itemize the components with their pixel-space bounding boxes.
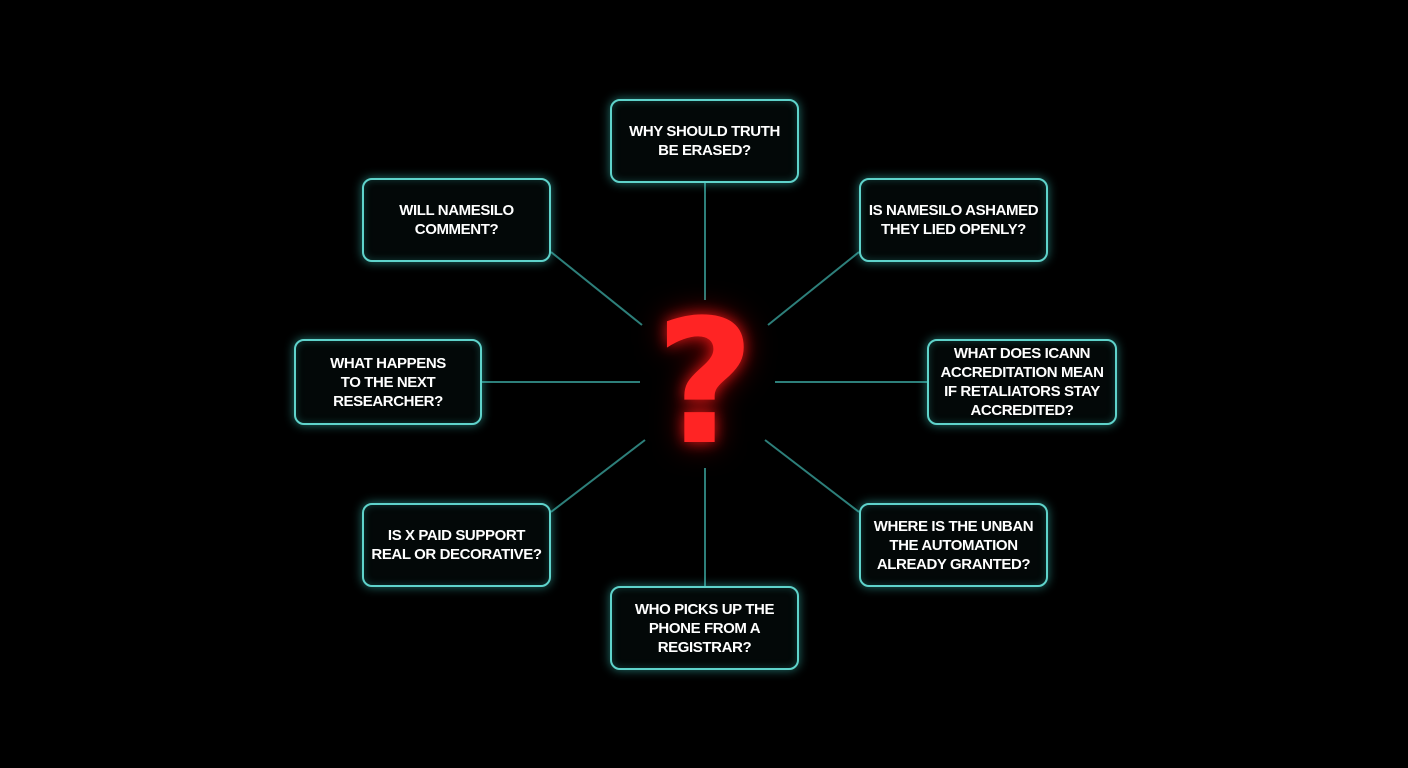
box: bottom: WHO PICKS UP THE	[635, 600, 774, 618]
box: left: WHAT HAPPENS	[330, 354, 446, 372]
box: bottom-right	[859, 503, 1048, 587]
box: bottom-right: THE AUTOMATION	[889, 536, 1018, 554]
box: top-right: THEY LIED OPENLY?	[881, 221, 1026, 238]
box: top-right	[859, 178, 1048, 262]
box: bottom: PHONE FROM A	[649, 620, 760, 636]
box: right: ACCREDITATION MEAN	[940, 364, 1104, 381]
box: top	[610, 99, 799, 183]
icon: red question mark: ?	[655, 282, 755, 483]
box: left: RESEARCHER?	[333, 392, 443, 410]
box: right: IF RETALIATORS STAY	[944, 383, 1100, 400]
box: top-left	[362, 178, 551, 262]
box: right: WHAT DOES ICANN	[954, 345, 1090, 362]
box: left: TO THE NEXT	[341, 374, 435, 390]
box: right: ACCREDITED?	[970, 402, 1074, 419]
box: top-left: WILL NAMESILO	[399, 202, 514, 219]
box: bottom	[610, 586, 799, 670]
box: bottom: REGISTRAR?	[658, 638, 751, 656]
box: bottom-left	[362, 503, 551, 587]
box: left	[294, 339, 482, 425]
box: top-right: IS NAMESILO ASHAMED	[869, 202, 1038, 219]
box: bottom-right: WHERE IS THE UNBAN	[874, 518, 1033, 534]
box: bottom-left: REAL OR DECORATIVE?	[371, 546, 542, 563]
box: top-left: COMMENT?	[415, 221, 498, 238]
box: top: WHY SHOULD TRUTH	[629, 123, 780, 140]
box: top: BE ERASED?	[658, 142, 751, 159]
box: bottom-left: IS X PAID SUPPORT	[388, 527, 525, 544]
box: right	[927, 339, 1117, 425]
box: bottom-right: ALREADY GRANTED?	[877, 556, 1030, 572]
